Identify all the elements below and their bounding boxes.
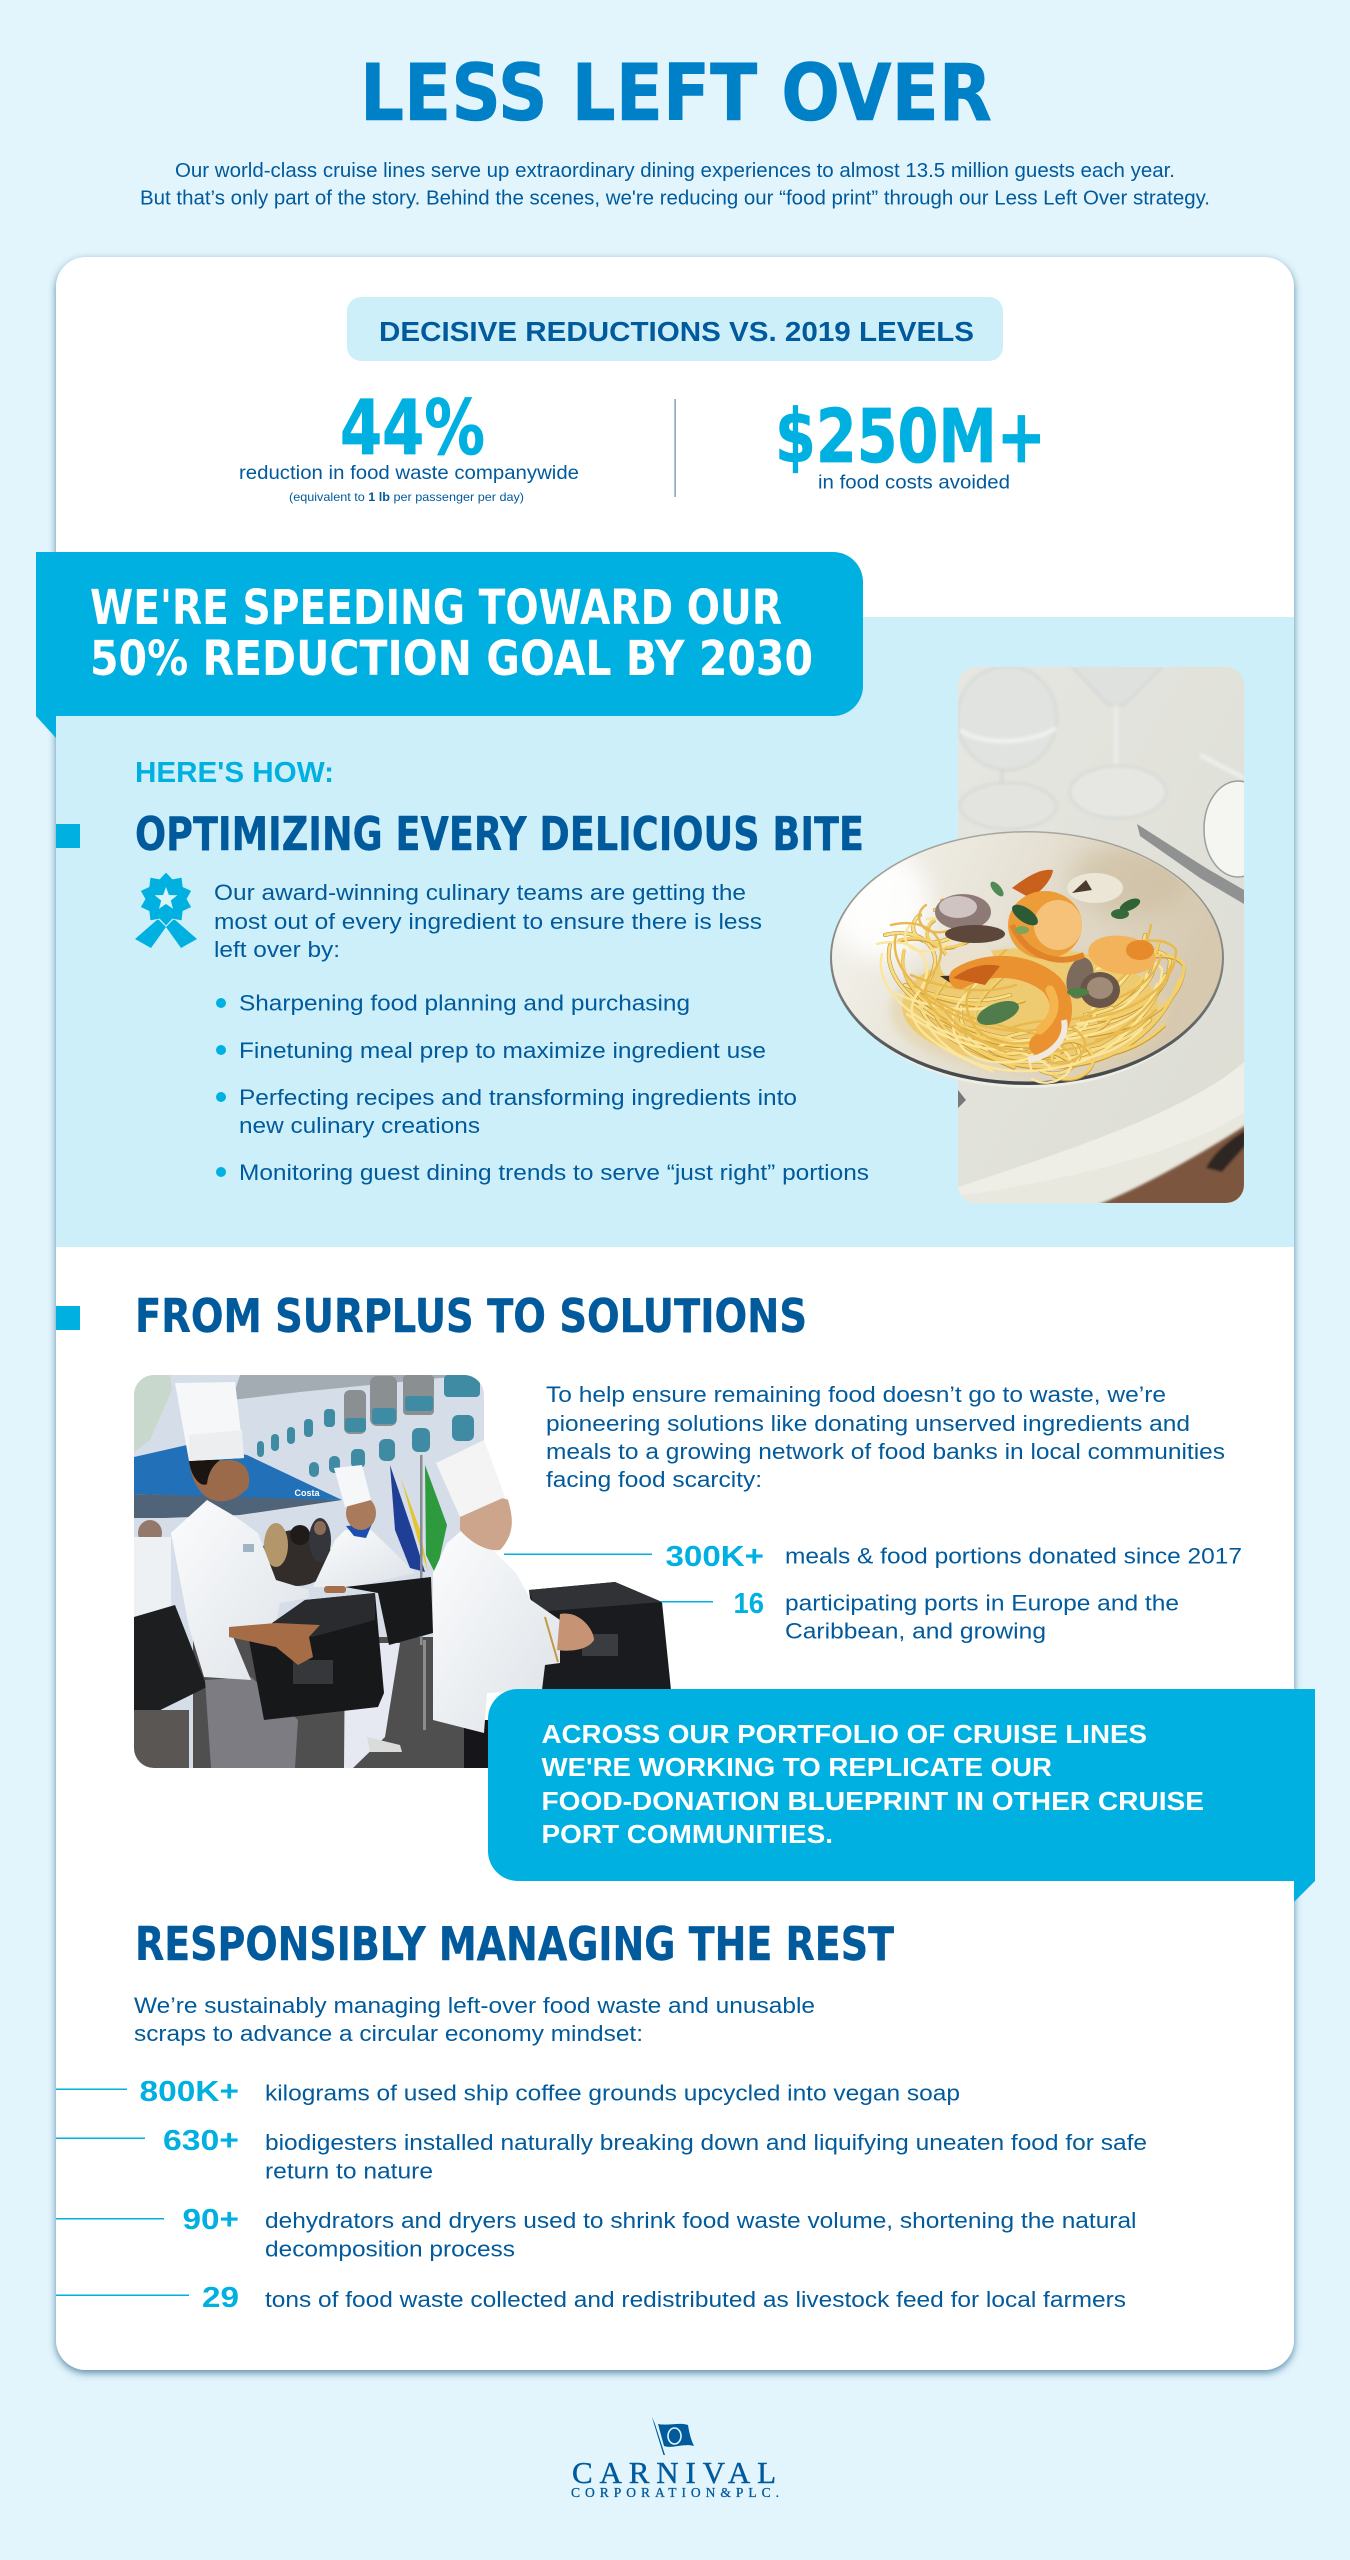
stat: 90+ dehydrators: decomposition process: [265, 2236, 515, 2262]
panel: decisive reductions: [239, 297, 1046, 504]
panel: light blue how section background: [56, 617, 1294, 1247]
right chef overlapping photo edge: [433, 1440, 671, 1768]
stat: $250M+: $250M+: [775, 394, 1046, 480]
stat: 630+ biodigesters: [56, 2125, 1147, 2184]
text block: culinary intro: Our award-winning culinary teams are getting the: [214, 880, 746, 905]
stat: 29 tons: tons of food waste collected and redistributed as livestock feed for local farmers: [265, 2287, 1126, 2312]
panel: main white card: [56, 257, 1294, 2370]
bullet list: new culinary creations: [239, 1113, 480, 1138]
bullet list: Perfecting recipes and transforming ingredients into: [239, 1085, 797, 1110]
glasses: [957, 666, 1244, 829]
plate: [837, 844, 1217, 1088]
icon: flag: [652, 2417, 694, 2455]
photo: chefs carrying food boxes: [134, 1375, 671, 1768]
bullet list: Monitoring guest dining trends to serve “just right” portions: [239, 1160, 869, 1185]
ship windows: [257, 1375, 480, 1477]
stat: 16 ports: [661, 1588, 1179, 1644]
label: here's how: HERE'S HOW:: [135, 757, 334, 789]
stat: 800K+ coffee grounds: kilograms of used ship coffee grounds upcycled into vegan soap: [265, 2080, 960, 2106]
heading pill: DECISIVE REDUCTIONS VS. 2019 LEVELS: [379, 316, 974, 347]
text block: surplus intro: To help ensure remaining food doesn’t go to waste, we’re: [546, 1382, 1166, 1407]
intro text: But that’s only part of the story. Behind the scenes, we're reducing our “food print” through our Less Left Over strategy.: [140, 188, 1210, 210]
heading: optimizing: OPTIMIZING EVERY DELICIOUS BITE: [135, 807, 864, 861]
marker square: [56, 824, 80, 848]
logo: Carnival Corporation & plc: CARNIVAL: [572, 2455, 776, 2490]
pasta: [877, 899, 1184, 1083]
text block: managing intro: scraps to advance a circular economy mindset:: [134, 2021, 643, 2046]
stat: 800K+ coffee grounds: [56, 2076, 960, 2108]
logo: Carnival Corporation & plc: CORPORATION&PLC.: [571, 2485, 779, 2500]
stat: 800K+ coffee grounds: 800K+: [140, 2076, 239, 2108]
text block: surplus intro: facing food scarcity:: [546, 1467, 762, 1492]
wood below table: [1097, 1125, 1246, 1205]
heading: responsibly managing the rest: RESPONSIBLY MANAGING THE REST: [135, 1917, 895, 1971]
intro text: Our world-class cruise lines serve up extraordinary dining experiences to almost 13.5 million guests each year.: [175, 160, 1175, 182]
text block: culinary intro: [214, 880, 762, 962]
text block: surplus intro: pioneering solutions like donating unserved ingredients and: [546, 1411, 1190, 1436]
stat: 90+ dehydrators: 90+: [182, 2204, 239, 2236]
intro text: [140, 160, 1210, 210]
middle chef: [313, 1465, 433, 1768]
stat: 44%: [239, 383, 579, 504]
banner: speeding toward goal: 50% REDUCTION GOAL BY 2030: [90, 631, 813, 687]
text block: managing intro: We’re sustainably managing left-over food waste and unusable: [134, 1993, 815, 2018]
callout: replicate blueprint: WE'RE WORKING TO REPLICATE OUR: [542, 1752, 1052, 1782]
left edge chef: [134, 1537, 171, 1617]
text block: managing intro: [134, 1993, 815, 2046]
heading pill: [347, 297, 1003, 361]
stat: 90+ dehydrators: [56, 2204, 1136, 2262]
callout: replicate blueprint: ACROSS OUR PORTFOLIO OF CRUISE LINES: [542, 1719, 1147, 1749]
crowd: [138, 1518, 332, 1586]
logo: Carnival Corporation & plc: [571, 2417, 779, 2500]
text block: surplus intro: [546, 1382, 1225, 1492]
stat: 29 tons: 29: [202, 2282, 239, 2314]
text block: surplus intro: meals to a growing network of food banks in local communities: [546, 1439, 1225, 1464]
banner: speeding toward goal: [36, 552, 863, 738]
stat: $250M+: in food costs avoided: [818, 472, 1010, 494]
stat: 300K+ meals: meals & food portions donated since 2017: [785, 1544, 1242, 1568]
stat: 44%: (equivalent to 1 lb per passenger per day): [289, 490, 524, 504]
bullet list: [216, 990, 869, 1185]
stat: 630+ biodigesters: return to nature: [265, 2158, 433, 2184]
left chef: [171, 1382, 384, 1768]
stat: 300K+ meals: 300K+: [666, 1541, 764, 1573]
stat: 44%: 44%: [340, 383, 485, 472]
ground: [193, 1637, 484, 1768]
title: LESS LEFT OVER: [360, 49, 992, 139]
stat: 90+ dehydrators: dehydrators and dryers used to shrink food waste volume, shortening the natural: [265, 2208, 1136, 2233]
photo: seafood pasta on table: [830, 666, 1272, 1205]
bullet list: Finetuning meal prep to maximize ingredient use: [239, 1038, 766, 1063]
photo: chefs carrying food boxes: Costa: [294, 1488, 320, 1498]
callout: replicate blueprint: FOOD-DONATION BLUEPRINT IN OTHER CRUISE: [542, 1786, 1204, 1816]
stat: 16 ports: participating ports in Europe and the: [785, 1590, 1179, 1616]
banner: speeding toward goal: WE'RE SPEEDING TOWARD OUR: [90, 580, 782, 636]
tent: [134, 1445, 342, 1500]
icon: award ribbon: [135, 872, 197, 948]
stat: 300K+ meals: [504, 1541, 1242, 1573]
side plate: [1203, 780, 1244, 878]
shrimp: [953, 870, 1158, 1060]
callout: replicate blueprint: [488, 1689, 1315, 1902]
bullet list: Sharpening food planning and purchasing: [239, 990, 690, 1016]
stat: 29 tons: [56, 2282, 1126, 2314]
stat: 630+ biodigesters: 630+: [163, 2125, 239, 2157]
stat: 16 ports: Caribbean, and growing: [785, 1618, 1046, 1644]
callout: replicate blueprint: PORT COMMUNITIES.: [542, 1819, 833, 1849]
flags: [390, 1465, 425, 1572]
knife: [1137, 824, 1244, 904]
herbs: [974, 880, 1142, 1030]
marker square: [56, 1306, 80, 1330]
text block: culinary intro: left over by:: [214, 937, 340, 962]
clams: [935, 873, 1123, 1008]
text block: culinary intro: most out of every ingredient to ensure there is less: [214, 909, 762, 934]
table edge: [958, 1062, 1244, 1203]
stat: 44%: reduction in food waste companywide: [239, 462, 579, 484]
stat: 630+ biodigesters: biodigesters installed naturally breaking down and liquifying uneaten food for safe: [265, 2130, 1147, 2155]
heading: from surplus to solutions: FROM SURPLUS TO SOLUTIONS: [135, 1289, 807, 1343]
stat: 16 ports: 16: [734, 1588, 764, 1620]
